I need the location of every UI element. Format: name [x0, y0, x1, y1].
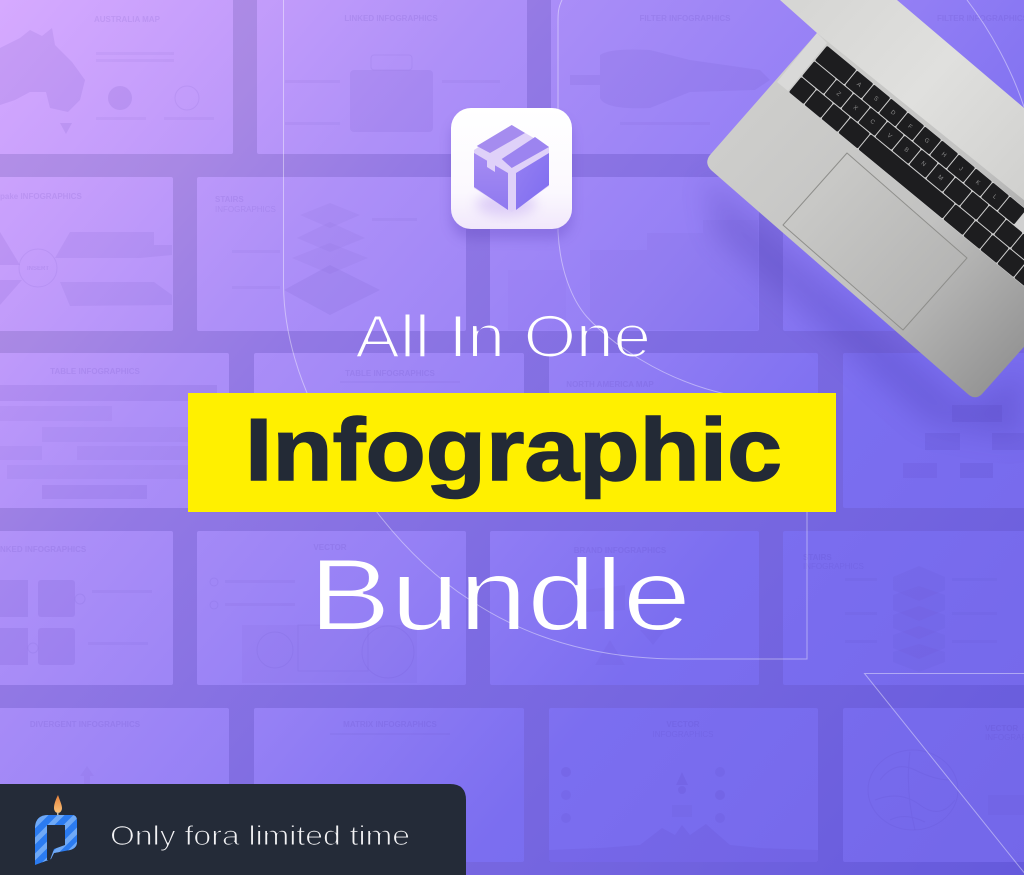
heading: All In One: All In One [355, 303, 651, 370]
keyboard row 2: Z [835, 91, 842, 98]
keyboard row 1: S [872, 96, 879, 103]
keyboard row 1: A [855, 82, 862, 89]
ghost: brain vector thumbnail: VECTOR [985, 724, 1018, 733]
ghost: stairs infographics thumbnail: STAIRS [215, 195, 244, 204]
ghost: hexagon infographics thumbnail: pake INFOGRAPHICS [0, 192, 82, 201]
laptop lid [780, 0, 1024, 205]
ghost: filter infographics thumbnail [570, 14, 770, 125]
ghost: vector illustration thumbnail [210, 543, 417, 683]
ghost: bar steps thumbnail [508, 220, 758, 330]
ghost: vector illustration thumbnail: VECTOR [313, 543, 347, 552]
highlighted title band [188, 393, 836, 512]
row 5 thumbnails [0, 708, 1024, 862]
ghost: brand infographics thumbnail [574, 546, 667, 665]
ghost: Australia map thumbnail: AUSTRALIA MAP [94, 15, 161, 24]
keyboard row 1: F [906, 124, 913, 131]
ghost: Australia map thumbnail [0, 15, 214, 134]
ghost: matrix infographics thumbnail: MATRIX INFOGRAPHICS [343, 720, 437, 729]
ghost: table infographics thumbnail middle [340, 369, 460, 383]
laptop [707, 0, 1024, 397]
icon: candle logo [35, 795, 77, 865]
keyboard row 1: G [923, 137, 930, 145]
row 4 thumbnails [0, 531, 1024, 685]
laptop base [707, 33, 1024, 397]
keyboard row 1: H [940, 152, 947, 159]
keyboard row 1: D [889, 110, 897, 117]
row 3 thumbnails [0, 353, 1024, 508]
ghost: table infographics thumbnail middle: TABLE INFOGRAPHICS [345, 369, 435, 378]
keyboard row 1: K [974, 180, 981, 187]
keyboard row 2: N [919, 161, 927, 168]
ghost: rocket vector thumbnail [549, 720, 818, 862]
ghost: table infographics thumbnail left: TABLE INFOGRAPHICS [50, 367, 140, 376]
ghost: hexagon infographics thumbnail: INSERT [27, 266, 49, 272]
keyboard row 1 [815, 46, 1024, 224]
ghost: linked infographics thumbnail [285, 14, 500, 132]
keyboard row 2: X [852, 105, 859, 112]
box right face [516, 153, 549, 210]
ghost: stairs stack thumbnail: STAIRS [803, 553, 832, 562]
ghost: divergent infographics thumbnail [30, 720, 141, 784]
ghost: rocket vector thumbnail: INFOGRAPHICS [653, 730, 713, 739]
ghost: hexagon infographics thumbnail [0, 192, 172, 306]
ghost: matrix blocks thumbnail [903, 405, 1024, 478]
ghost: brand infographics thumbnail: BRAND INFOGRAPHICS [574, 546, 667, 555]
keyboard row 3 with space bar [789, 77, 1024, 297]
keyboard row 2: V [886, 133, 893, 140]
keyboard row 1: J [957, 166, 964, 173]
ghost: stairs stack thumbnail: INFOGRAPHICS [803, 562, 864, 571]
box lid left panel [477, 125, 525, 153]
decorative outline curves [284, 0, 1024, 875]
row 1 thumbnails [0, 0, 1024, 154]
keyboard row 2: B [903, 147, 910, 154]
row 2 thumbnails [0, 177, 1024, 331]
box left face [474, 153, 508, 210]
keyboard row 2: C [869, 119, 876, 126]
outline: bottom right angle [864, 674, 1024, 875]
outline: left rounded curve [284, 0, 807, 659]
footer badge [0, 784, 466, 875]
ghost: table infographics thumbnail left [0, 367, 229, 499]
ghost: north america thumbnail: NORTH AMERICA MAP [566, 380, 654, 389]
box tape tab [487, 158, 495, 172]
yellow band [188, 393, 836, 512]
badge background [0, 784, 466, 875]
icon: package box [451, 108, 572, 229]
ghost: linked infographics thumbnail: LINKED INFOGRAPHICS [344, 14, 438, 23]
ghost: puzzle thumbnail [0, 545, 152, 665]
heading: Infographic: Infographic [245, 400, 782, 499]
keyboard row 2: M [936, 174, 944, 182]
icon shadow [451, 118, 572, 239]
ghost: divergent infographics thumbnail: DIVERGENT INFOGRAPHICS [30, 720, 141, 729]
keyboard row 1: L [991, 194, 998, 201]
ghost: filter infographics thumbnail: FILTER INFOGRAPHICS [640, 14, 731, 23]
ghost: puzzle thumbnail: NKED INFOGRAPHICS [0, 545, 87, 554]
box strapping silhouette [474, 125, 549, 212]
icon tile [451, 108, 572, 229]
ghost: stairs infographics thumbnail [215, 195, 417, 315]
hinge strip [777, 33, 827, 91]
ghost: matrix infographics thumbnail [330, 720, 450, 735]
ghost: stairs stack thumbnail [803, 553, 997, 672]
heading: Bundle: Bundle [309, 538, 691, 652]
outline: centre rounded curve [558, 0, 807, 430]
badge text: Only fora limited time [110, 820, 410, 851]
keyboard [788, 45, 1024, 302]
keyboard row 2 [802, 61, 1024, 275]
outline: top right arc [967, 0, 1024, 107]
box lid right panel [502, 137, 549, 168]
trackpad [783, 153, 967, 330]
ghost: stairs infographics thumbnail: INFOGRAPHICS [215, 205, 276, 214]
laptop shadow [705, 175, 1024, 440]
ghost: brain vector thumbnail [868, 724, 1024, 830]
ghost: rocket vector thumbnail: VECTOR [666, 720, 700, 729]
